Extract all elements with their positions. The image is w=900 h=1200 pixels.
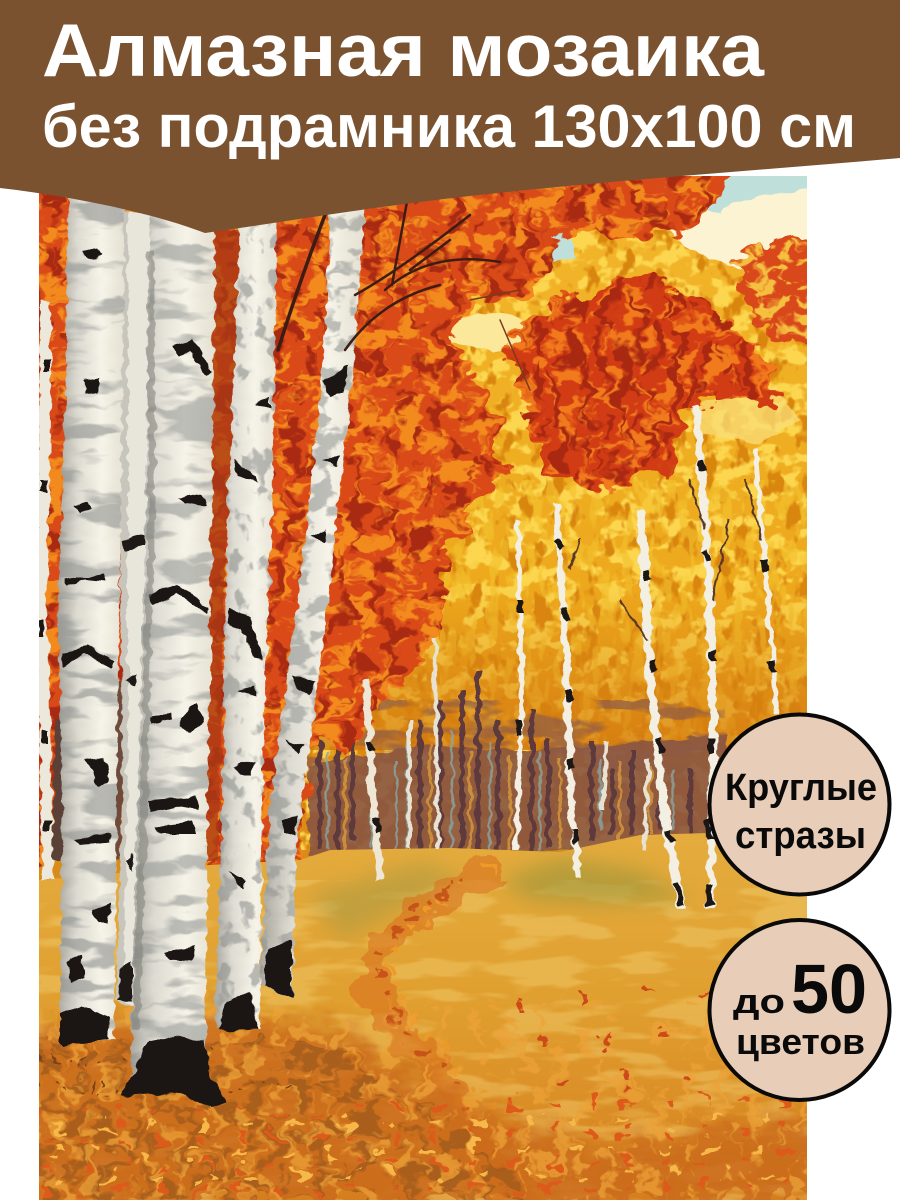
painting: autumn birch forest [30, 170, 820, 1200]
badge: up to 50 colours: цветов [736, 1021, 865, 1062]
brown header banner [0, 0, 900, 233]
painting background: golden forest [39, 227, 807, 880]
foreground fallen leaves [30, 985, 820, 1200]
birch trunk: left [56, 198, 126, 1047]
small distant birches [366, 405, 777, 908]
birch trunk: middle [210, 215, 280, 1035]
sky and cloud [450, 170, 820, 445]
dark trunk gaps and tree behind [52, 230, 240, 860]
left orange canopy behind trunks [30, 170, 740, 860]
badge: up to 50 colours: до [733, 983, 785, 1021]
birch trunk: thin second [116, 212, 152, 1005]
badge: up to 50 colours [710, 920, 890, 1100]
far-left thin birch [42, 300, 48, 880]
badge: round rhinestones [710, 714, 890, 894]
birch trunk: main [122, 210, 228, 1108]
birch trunk: leaning right [255, 205, 370, 1005]
badge: round rhinestones: стразы [735, 815, 866, 857]
bare dark branches [278, 185, 530, 390]
badge: round rhinestones: Круглые [725, 767, 877, 809]
title: subtitle line: без подрамника 130х100 см [42, 93, 856, 160]
ground [39, 830, 807, 1200]
dark distant tree line [305, 670, 725, 855]
badge: up to 50 colours: 50 [791, 950, 867, 1028]
leaf-covered footpath [372, 865, 555, 1200]
red maple canopy right [510, 235, 815, 490]
title: main line: Алмазная мозаика [42, 8, 765, 92]
